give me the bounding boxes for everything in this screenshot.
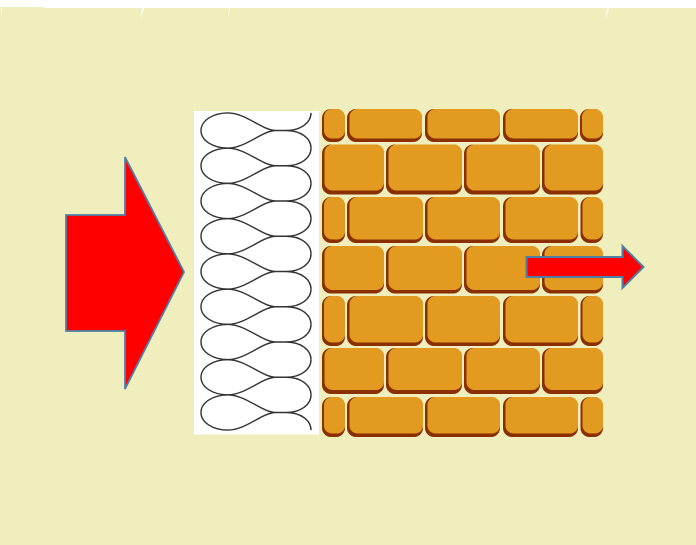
brick row 3: [322, 197, 603, 243]
brick row 4: [322, 246, 603, 294]
brick row 1: [322, 109, 603, 142]
brick row 5: [322, 296, 603, 346]
small red arrow: outgoing heat: [526, 246, 644, 288]
brick row 2: [322, 144, 603, 194]
insulation layer: [194, 111, 319, 434]
brick row 7: [322, 397, 603, 437]
brick wall: [322, 109, 603, 437]
large red arrow: incoming heat: [66, 157, 184, 389]
brick row 6: [322, 348, 603, 394]
